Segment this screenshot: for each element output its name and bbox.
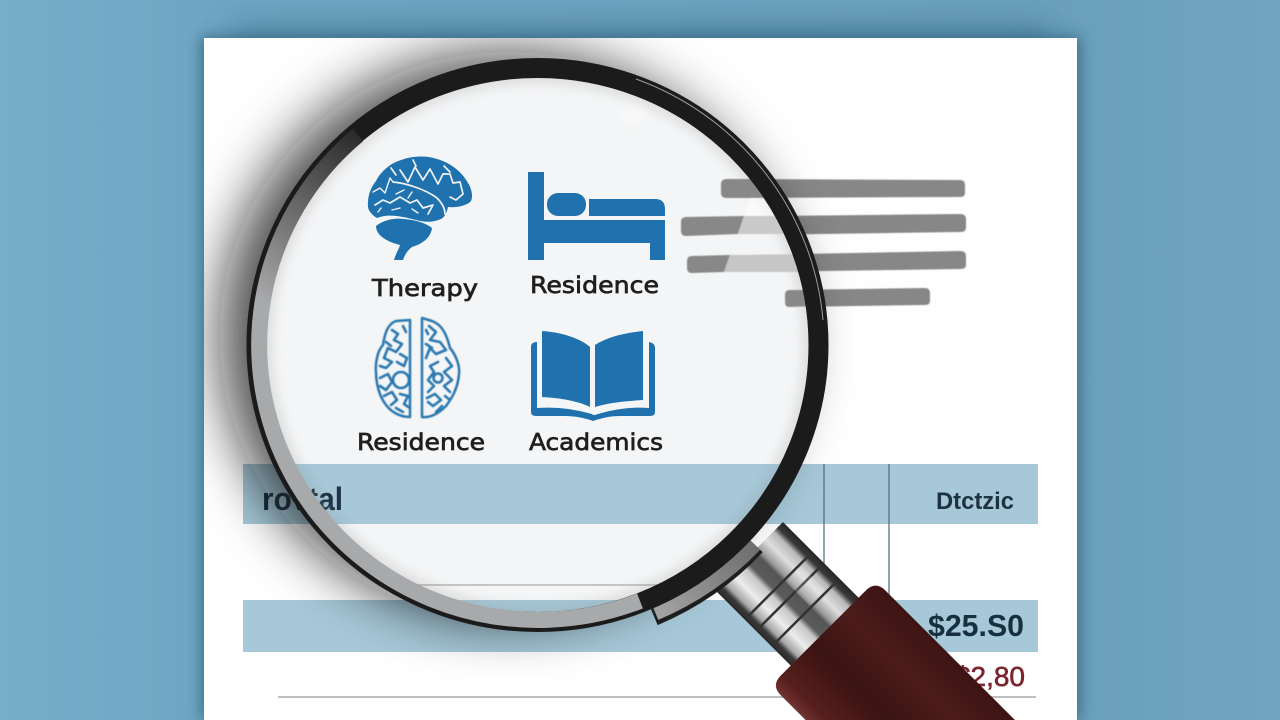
invoice paper (200, 36, 1081, 720)
magnifier handle (715, 522, 1015, 720)
label: Therapy: Therapy (371, 276, 478, 302)
metal ferrule (715, 522, 862, 669)
header label right: Dtctzic (936, 488, 1014, 515)
label: Academics: Academics (529, 430, 663, 456)
infographic scene (192, 6, 1091, 720)
magnifier rim (256, 68, 823, 622)
outer bevel (653, 544, 754, 614)
rim highlight (636, 79, 823, 320)
lens glass (267, 78, 808, 612)
total amount: $25.S0 (928, 608, 1024, 643)
total row (243, 600, 1038, 652)
blurred text lines (681, 179, 966, 307)
icon: open book (531, 331, 655, 421)
bottom rule (278, 696, 1036, 698)
column lines (824, 464, 889, 600)
icon: brain top view (376, 318, 459, 417)
lines seen through glass (681, 179, 815, 307)
inner rim shade (266, 77, 810, 613)
thin rule (410, 584, 830, 586)
lens drop shadow (220, 52, 796, 620)
header row (243, 464, 1038, 524)
label: Residence top: Residence (530, 273, 659, 299)
invoice table (243, 464, 1038, 697)
table seen through glass (296, 464, 780, 524)
silver left arc (259, 135, 640, 620)
wooden grip (776, 586, 1015, 720)
icon: bed (528, 172, 665, 260)
lens glass: rovtal (262, 481, 343, 517)
black ring (256, 68, 818, 622)
red amount: $2,80 (955, 661, 1025, 692)
icon: brain side view (368, 156, 472, 260)
header label left: rovtal (262, 481, 343, 517)
glass glint (618, 103, 650, 128)
label: Residence bottom: Residence (357, 430, 485, 456)
